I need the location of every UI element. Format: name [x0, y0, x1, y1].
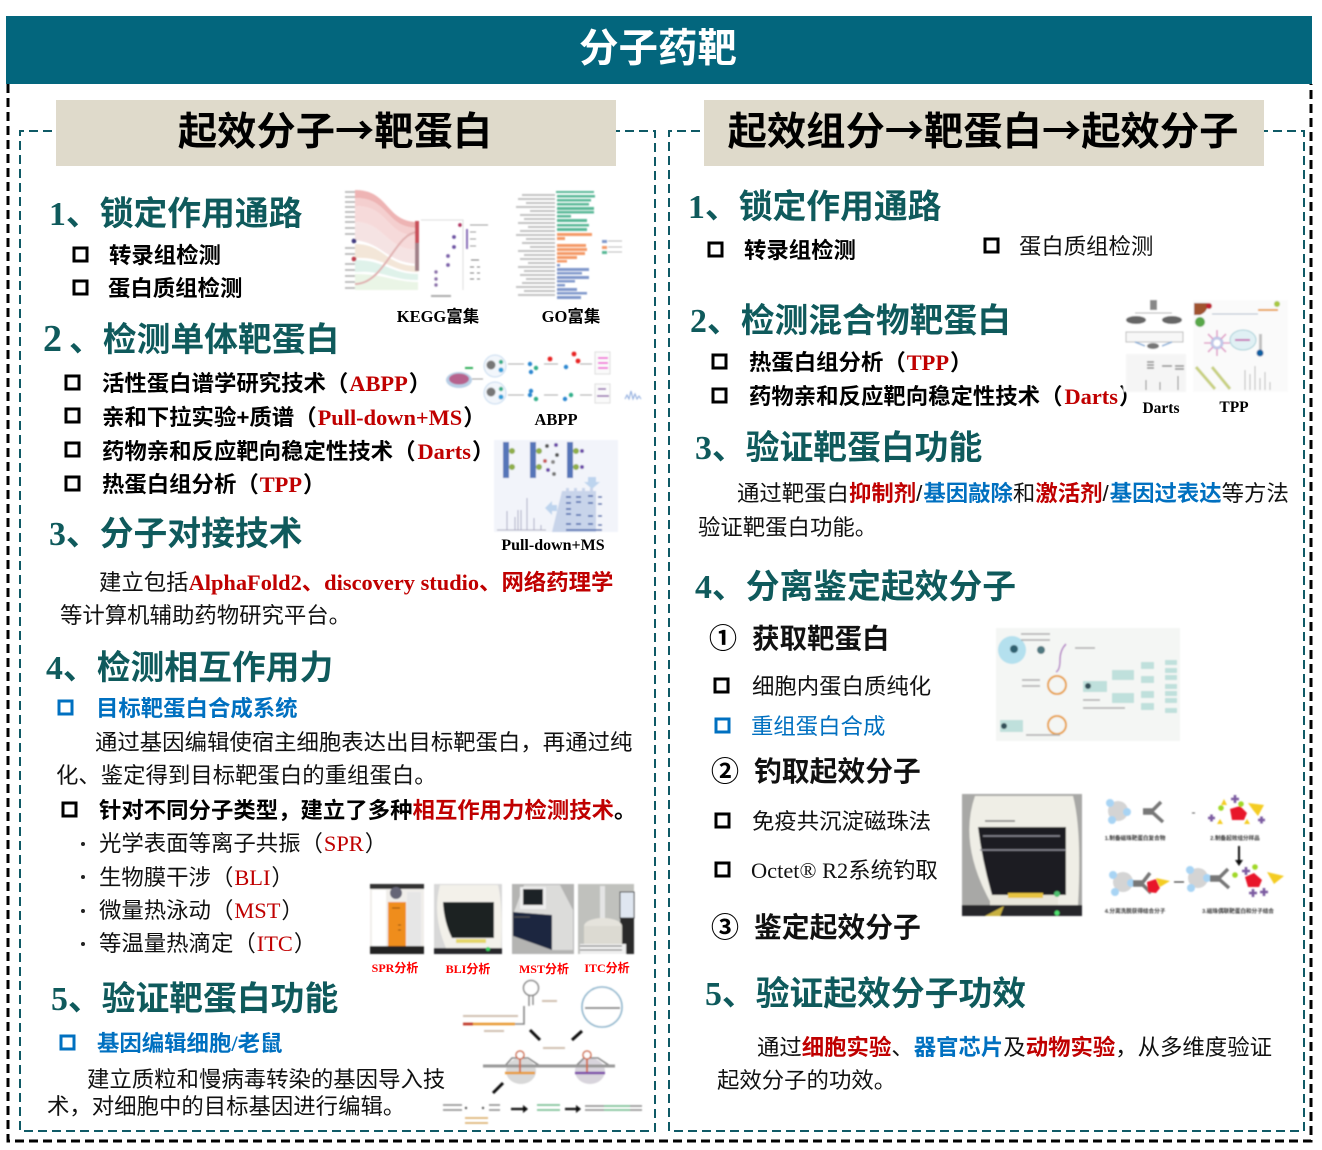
text block: target validation	[698, 480, 1289, 540]
photo: BLI instrument	[434, 884, 502, 954]
section heading: 4 检测相互作用力: 4、检测相互作用力	[46, 649, 333, 687]
photo: MST instrument	[512, 884, 574, 954]
text block: recombinant protein: 通过基因编辑使宿主细胞表达出目标靶蛋白，再通过纯	[95, 730, 632, 755]
text block: efficacy validation: 起效分子的功效。	[717, 1068, 896, 1093]
step 3: 鉴定起效分子: ③	[711, 912, 739, 943]
right panel heading: 起效组分→靶蛋白→起效分子	[728, 100, 1238, 157]
diagram: TPP workflow	[1193, 300, 1288, 392]
diagram: magnetic bead co-IP steps: 4.分离洗脱获得结合分子	[1105, 907, 1166, 915]
captions: instrument analyses: SPR分析	[372, 960, 418, 975]
checklist: 蛋白质组检测: 蛋白质组检测	[1019, 234, 1153, 259]
checklist: TPP: 热蛋白组分析（TPP）	[102, 472, 325, 497]
captions: Darts and TPP: TPP	[1219, 399, 1249, 416]
list: interaction techniques: 微量热泳动（MST）	[99, 898, 304, 923]
checklist: Pull-down+MS: 亲和下拉实验+质谱（Pull-down+MS）	[102, 404, 486, 430]
section heading: 1 锁定作用通路: 1、锁定作用通路	[49, 195, 303, 233]
text block: target validation: 验证靶蛋白功能。	[698, 515, 877, 540]
section heading: 2 检测单体靶蛋白: 2、检测单体靶蛋白	[43, 318, 339, 360]
text block: target validation: 通过靶蛋白抑制剂/基因敲除和激活剂/基因过表达等方法	[737, 480, 1289, 506]
checklist: Darts: 药物亲和反应靶向稳定性技术（Darts）	[749, 383, 1141, 409]
captions: instrument analyses	[372, 960, 630, 976]
diagram: Pull-down+MS	[494, 440, 618, 532]
captions: instrument analyses: ITC分析	[584, 960, 630, 975]
caption: GO富集: GO富集	[542, 306, 601, 326]
section heading: 3 分子对接技术: 3、分子对接技术	[49, 515, 303, 553]
diagram: ABPP workflow	[446, 352, 641, 404]
photo: Octet instrument	[962, 794, 1082, 916]
captions: instrument analyses: BLI分析	[446, 961, 490, 976]
step 2: 钓取起效分子: 钓取起效分子	[754, 756, 921, 787]
left panel heading: 起效分子→靶蛋白	[178, 100, 492, 157]
checklist: 转录组检测: 转录组检测	[109, 242, 221, 268]
checklist: 转录组检测: 转录组检测	[744, 237, 856, 263]
checklist: Octet R2: Octet® R2系统钓取	[751, 858, 938, 883]
checklist: 蛋白质组检测: 蛋白质组检测	[108, 275, 242, 301]
chart: GO enrichment bars	[516, 191, 622, 299]
text block: recombinant protein: 化、鉴定得到目标靶蛋白的重组蛋白。	[56, 763, 437, 788]
sub-heading: 基因编辑细胞/老鼠: 基因编辑细胞/老鼠	[97, 1031, 282, 1056]
section heading: 5 验证靶蛋白功能: 5、验证靶蛋白功能	[51, 980, 338, 1018]
diagram: Darts workflow	[1123, 298, 1187, 392]
step 1: 获取靶蛋白: ①	[709, 623, 737, 654]
panel: right column 起效组分→靶蛋白→起效分子	[669, 100, 1304, 1131]
text block: computational platforms	[60, 569, 613, 628]
diagram: magnetic bead co-IP steps: 1.制备磁珠靶蛋白复合物	[1105, 834, 1166, 842]
checklist: TPP: 热蛋白组分析（TPP）	[749, 350, 972, 375]
section heading: 5 验证起效分子功效: 5、验证起效分子功效	[705, 975, 1026, 1013]
captions: instrument analyses: MST分析	[519, 961, 569, 976]
diagram: recombinant protein workflow	[996, 628, 1180, 741]
diagram: magnetic bead co-IP steps: 2.制备起效组分样品	[1210, 834, 1260, 842]
photo: ITC instrument	[578, 884, 634, 954]
text block: gene editing: 建立质粒和慢病毒转染的基因导入技	[87, 1067, 445, 1092]
list: interaction techniques	[81, 831, 387, 956]
text block: gene editing	[47, 1067, 445, 1119]
photo: SPR instrument	[370, 884, 424, 954]
checklist: 细胞内蛋白质纯化: 细胞内蛋白质纯化	[752, 674, 931, 699]
left panel heading	[56, 100, 616, 166]
caption: KEGG富集: KEGG富集	[397, 306, 480, 326]
text block: gene editing: 术，对细胞中的目标基因进行编辑。	[47, 1094, 405, 1119]
chart: KEGG enrichment sankey	[345, 190, 488, 297]
checklist: Darts: 药物亲和反应靶向稳定性技术（Darts）	[102, 438, 494, 464]
section heading: 4 分离鉴定起效分子: 4、分离鉴定起效分子	[695, 568, 1016, 606]
step 2: 钓取起效分子: ②	[711, 756, 739, 787]
text block: efficacy validation	[717, 1034, 1272, 1093]
checklist: 免疫共沉淀磁珠法: 免疫共沉淀磁珠法	[752, 809, 931, 834]
list: interaction techniques: 光学表面等离子共振（SPR）	[99, 831, 387, 856]
list: interaction techniques: 生物膜干涉（BLI）	[99, 865, 294, 890]
checklist: ABPP: 活性蛋白谱学研究技术（ABPP）	[102, 371, 431, 396]
step 1: 获取靶蛋白: 获取靶蛋白	[752, 623, 890, 654]
section heading: 1 锁定作用通路: 1、锁定作用通路	[688, 188, 942, 226]
checklist: 重组蛋白合成: 重组蛋白合成	[751, 714, 885, 739]
text block: computational platforms: 建立包括AlphaFold2、discovery studio、网络药理学	[99, 569, 613, 595]
section heading: 3 验证靶蛋白功能: 3、验证靶蛋白功能	[695, 429, 982, 467]
text block: interaction detection techniques: 针对不同分子类型，建立了多种相互作用力检测技术。	[99, 797, 636, 823]
title banner: 分子药靶	[579, 27, 737, 71]
diagram: magnetic bead co-IP steps: 3.磁珠偶联靶蛋白和分子结合	[1202, 907, 1274, 915]
captions: Darts and TPP	[1142, 399, 1249, 417]
text block: computational platforms: 等计算机辅助药物研究平台。	[60, 603, 351, 628]
text block: recombinant protein	[56, 730, 632, 788]
sub-heading: 目标靶蛋白合成系统: 目标靶蛋白合成系统	[96, 696, 298, 721]
section heading: 2 检测混合物靶蛋白: 2、检测混合物靶蛋白	[690, 302, 1011, 340]
diagram: magnetic bead co-IP steps	[1105, 795, 1284, 915]
panel: left column 起效分子→靶蛋白	[20, 100, 655, 1131]
diagram: CRISPR gene editing	[443, 980, 642, 1123]
captions: Darts and TPP: Darts	[1142, 400, 1180, 417]
caption: Pull-down+MS: Pull-down+MS	[501, 537, 605, 554]
text block: efficacy validation: 通过细胞实验、器官芯片及动物实验，从多维度验证	[757, 1034, 1272, 1060]
title banner	[6, 16, 1312, 84]
step 3: 鉴定起效分子: 鉴定起效分子	[754, 912, 921, 943]
list: interaction techniques: 等温量热滴定（ITC）	[99, 931, 316, 956]
caption: ABPP: ABPP	[534, 410, 578, 429]
